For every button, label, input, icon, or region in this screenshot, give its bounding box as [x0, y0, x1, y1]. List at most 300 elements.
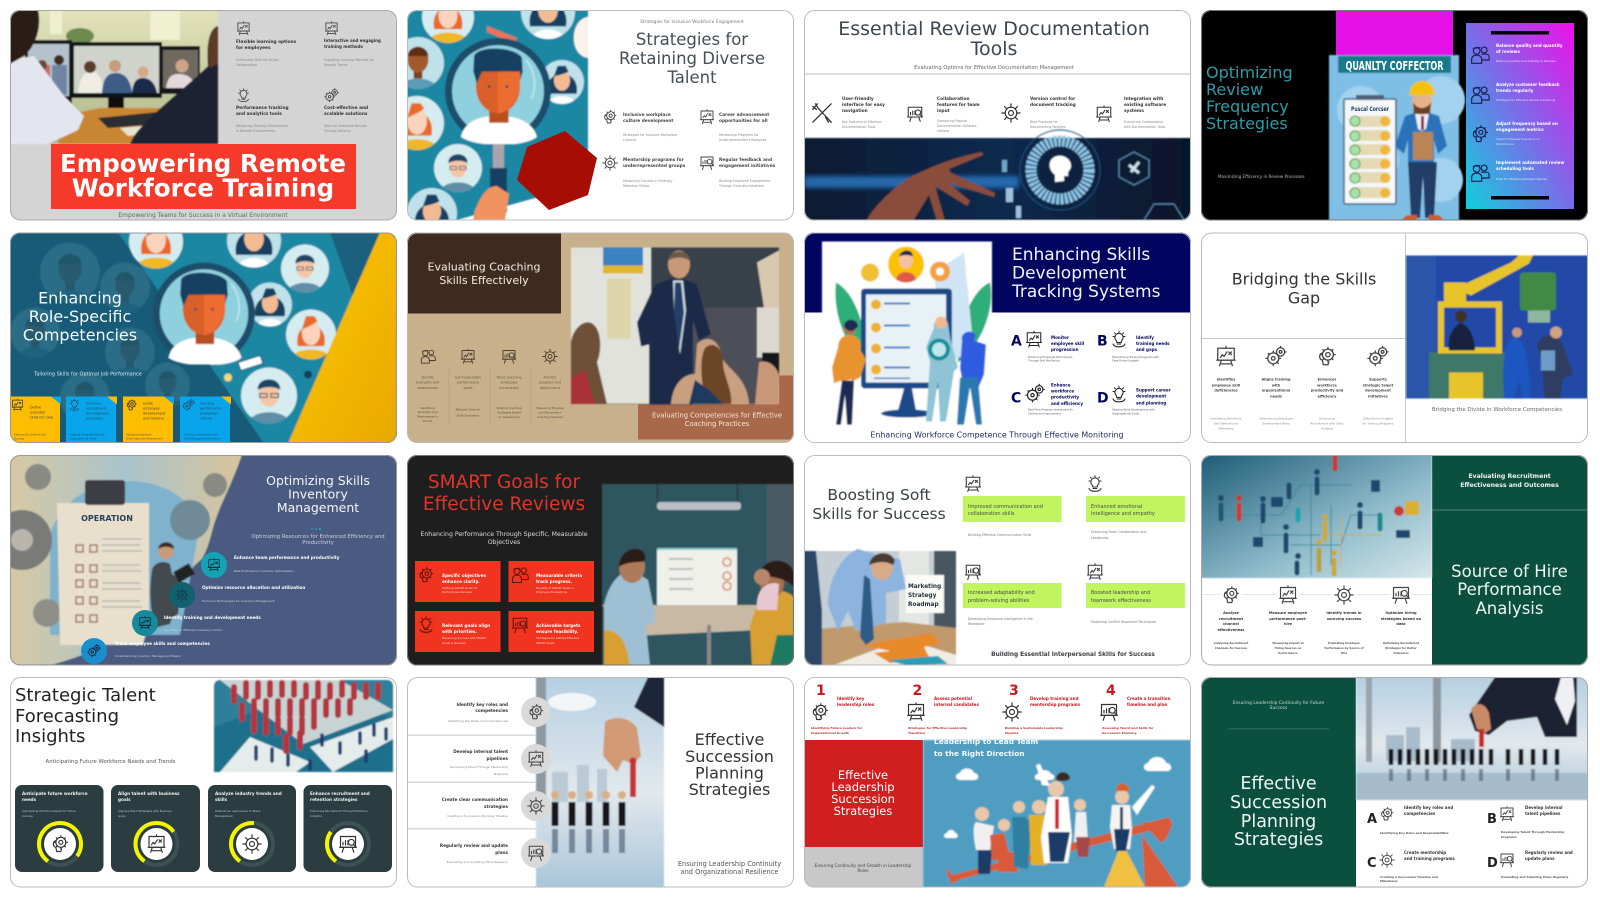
title: Enhancing: [38, 288, 122, 308]
subtitle: Empowering Teams for Success in a Virtual Environment: [118, 212, 288, 219]
caption: Bridging the Divide in Workforce Competencies: [1432, 407, 1562, 413]
roadmap sign: Strategy: [908, 593, 937, 599]
item: performance tracking: Performance tracking: [236, 105, 289, 111]
item: performance tracking: and analytics tools: [236, 111, 282, 117]
item D: Regularly review and: [1525, 850, 1573, 855]
subtitle: Anticipating Future Workforce Needs and Trends: [46, 759, 176, 765]
item: aligns training: organizational: [1262, 388, 1290, 392]
item: adjust frequency: [1473, 121, 1558, 146]
item: analyze channels: channel: [1223, 622, 1239, 626]
box: enhance recruitment: Aligning Competencies with: [70, 432, 105, 436]
red hexagon: [517, 131, 597, 210]
step 1: [811, 683, 875, 735]
subtitle: Success: [1270, 705, 1288, 711]
item: aligns training: Development Plans: [1262, 422, 1291, 426]
card: anticipate needs: Anticipate future workforce: [22, 791, 88, 796]
item: automated scheduling: scheduling tools: [1496, 166, 1534, 171]
card: analyze trends: [208, 785, 296, 873]
item A: monitor progression: employee skill: [1051, 341, 1085, 346]
item: user-friendly: [813, 96, 885, 129]
title: Succession: [685, 747, 774, 766]
item: improved communication: Improved communication and: [968, 504, 1043, 510]
item: leadership: Boosted leadership and: [1091, 590, 1150, 596]
step 1: Organizational Growth: [811, 731, 849, 735]
panel: Optimizing Skills Inventory Management: [0, 455, 397, 666]
item: inclusive culture: Inclusive workplace: [623, 112, 671, 118]
subtitle: Strategies for Inclusive Workforce Engagement: [640, 19, 744, 25]
tagline: Building Essential Interpersonal Skills for Success: [991, 652, 1155, 658]
title: Talent: [666, 68, 717, 87]
title: Forecasting: [15, 706, 119, 727]
item: adaptability: Developing Emotional Intelligence in the: [968, 617, 1033, 621]
illustration: operation checklist: [0, 455, 242, 665]
item: integration: Enhancing Collaboration: [1124, 120, 1163, 124]
panel: Enhancing Skills Development Tracking Systems: [804, 232, 1191, 444]
item: identifies deficiencies: employee skill: [1212, 384, 1240, 388]
item: integration: [1096, 96, 1166, 129]
item: review plans: plans: [495, 850, 509, 855]
item: balance quality: Balance quality and quantity: [1496, 43, 1563, 48]
panel: Effective Succession Planning Strategies (green): [1201, 677, 1588, 888]
item: career advancement: Underrepresented Employees: [719, 138, 767, 142]
title: Succession: [1230, 793, 1327, 813]
title: Analysis: [1476, 599, 1543, 618]
item: interactive training: training methods: [324, 44, 364, 49]
step 2: Strategies for Effective Leadership: [908, 726, 968, 730]
item: internal pipelines: [450, 744, 551, 776]
item: version control: document tracking: [1030, 102, 1076, 108]
title text: Workforce Training: [72, 174, 334, 202]
item: optimize allocation: [169, 582, 305, 608]
step 4: Create a transition: [1127, 696, 1171, 701]
item: interactive training: Interactive and engaging: [324, 38, 381, 43]
item: identify strengths: Strengths and: [418, 410, 438, 414]
item: enhances productivity: Enhancing: [1319, 416, 1335, 420]
item: measure performance: Measuring Impact of: [1272, 641, 1304, 645]
box: enhance recruitment: processes: [86, 416, 103, 420]
title: Insights: [15, 726, 85, 747]
item: identify strengths: Weaknesses in: [417, 414, 438, 418]
item: flexible learning: Enhancing Skills for Virtual: [236, 58, 279, 62]
item D: D: [1487, 856, 1498, 871]
item C: enhance productivity: workforce: [1051, 388, 1074, 394]
item: internal pipelines: Develop internal talent: [453, 749, 508, 754]
item: identify key roles: Identify key roles and: [456, 702, 508, 707]
item: optimize strategies: Outcomes: [1393, 651, 1409, 655]
item: identifies deficiencies: Identifies: [1217, 378, 1235, 382]
card: analyze trends: Management: [215, 814, 233, 818]
card: anticipate needs: [15, 785, 104, 873]
item: enhanced emotional intelligence: [1086, 476, 1185, 540]
panel: Source of Hire Performance Analysis: [1201, 449, 1588, 666]
item: inclusive culture: Cultures: [623, 138, 637, 142]
box: define skills: Success: [14, 436, 25, 440]
box: guide development: Skills Gaps and Development: [126, 436, 163, 440]
title: Frequency: [1206, 97, 1289, 116]
box: measurable criteria: Employee Evaluations: [536, 590, 567, 594]
item B: identify needs: Identify: [1136, 335, 1154, 340]
box: improve evaluation: [180, 396, 231, 444]
item: version control: Documenting Reviews: [1030, 125, 1066, 129]
green block: [1201, 677, 1356, 888]
box: achievable targets: ensure feasibility.: [536, 629, 579, 634]
photo: coach with team: [571, 248, 779, 404]
step 2: Assess potential: [934, 696, 973, 701]
item: leadership: Mastering Conflict Resolution Techniques: [1091, 620, 1157, 624]
item: adjust frequency: engagement metrics: [1496, 127, 1544, 132]
item: identify trends: [1324, 584, 1364, 655]
box: measurable criteria: Benefits of SMART Goals in: [536, 586, 574, 590]
item: aligns training: [1259, 346, 1293, 426]
item: supports strategy: for Training Programs: [1363, 422, 1394, 426]
item: supports strategy: Data-Driven Insights: [1363, 416, 1393, 420]
item C: enhance productivity: Enhance: [1051, 382, 1071, 388]
item A: competencies: [1404, 811, 1436, 816]
title: Optimizing: [1206, 63, 1293, 82]
panel: Effective Succession Planning Strategies (left list): [407, 677, 794, 888]
illustration: faces and magnifier: [10, 214, 397, 444]
item: optimize strategies: Strategies for Better: [1385, 646, 1417, 650]
heading on checklist: OPERATION: [81, 514, 133, 523]
item: inclusive culture: culture development: [623, 118, 673, 124]
box: achievable targets: Strategies for Setting Effective: [536, 636, 579, 640]
item: analyze feedback: Strategies for Effective Review Scheduling: [1496, 98, 1556, 102]
item: measurable goals: Effective Tools for: [456, 408, 481, 412]
item B: identify needs: training needs: [1136, 341, 1170, 346]
item C: enhance productivity: C: [1011, 390, 1021, 406]
item: analyze channels: Analyzing Recruitment: [1214, 641, 1249, 645]
item: user-friendly: navigation: [842, 108, 868, 114]
card: analyze trends: Analyze industry trends and: [215, 791, 282, 796]
item: improved communication: Building Effective Communication Skills: [968, 533, 1032, 537]
item: tailor strategies: accordingly: [499, 386, 519, 390]
item: enhanced emotional intelligence: Leadership: [1091, 536, 1109, 540]
item: identify key roles: competencies: [475, 708, 508, 713]
item: version control: Best Practices for: [1030, 120, 1059, 124]
item A: monitor progression: Enhancing Employee Performance: [1028, 355, 1073, 359]
item: aligns training: Aligns training: [1261, 378, 1291, 382]
item: flexible learning: Flexible learning options: [236, 39, 297, 45]
item: identify strengths: [416, 350, 439, 423]
photo: boardroom figures: [1356, 677, 1588, 800]
title: Skills for Success: [812, 505, 946, 523]
item: enhances productivity: efficiency: [1318, 394, 1337, 398]
card: enhance recruitment: Enhance recruitment and: [310, 791, 370, 796]
item D: support career: development: [1136, 394, 1166, 398]
item: supports strategy: development: [1365, 388, 1391, 392]
panel: Essential Review Documentation Tools: [804, 10, 1191, 221]
item D: Evaluating and Adjusting Plans Regularly: [1501, 875, 1568, 879]
item: monitor progress: progress and: [539, 380, 561, 384]
item: review plans: Evaluating and Adjusting Plans Regularly: [447, 860, 508, 864]
item B: identify needs: and gaps: [1136, 347, 1158, 352]
item: identify strengths: strengths and: [416, 380, 439, 384]
item: user-friendly: Key Features of Effective: [842, 120, 882, 124]
item: optimize strategies: Optimize hiring: [1385, 611, 1417, 615]
item: identify trends: Performance by Source of: [1324, 646, 1364, 650]
item: improved communication: collaboration skills: [968, 511, 1015, 517]
item C: [1367, 850, 1455, 883]
box: improve evaluation: evaluation: [200, 412, 218, 416]
item: enhance performance: Best Practices for Inventory Optimization: [234, 569, 294, 573]
step 1: Identifying Future Leaders for: [811, 726, 863, 730]
item: analyze channels: Channels for Success: [1215, 646, 1247, 650]
tagline: Enhancing Workforce Competence Through Effective Monitoring: [870, 430, 1124, 440]
box: achievable targets: SMART Goals: [536, 641, 555, 645]
item: identify training: Key Skills for Effective Inventory Control: [164, 628, 222, 632]
card: anticipate needs: Success: [22, 814, 33, 818]
item: review plans: Regularly review and update: [440, 843, 508, 848]
title: Strategies: [1206, 114, 1288, 133]
item: cost-effective: scalable solutions: [324, 111, 368, 117]
subtitle: Evaluating Recruitment: [1468, 473, 1551, 480]
item: career advancement: Career advancement: [719, 112, 769, 118]
box: measurable criteria: [508, 561, 594, 602]
roadmap sign: Roadmap: [908, 602, 939, 608]
item: user-friendly: User-friendly: [842, 96, 874, 102]
illustration: team and tracking monitor: [822, 242, 992, 424]
item: monitor progress: adjust plans: [540, 386, 561, 390]
step 2: internal candidates: [934, 702, 979, 707]
title: Enhancing Skills: [1012, 245, 1150, 265]
item: optimize strategies: [1381, 584, 1422, 655]
item D: support career: D: [1097, 390, 1109, 406]
box: define skills: Defining Key Skills for Job: [14, 432, 46, 436]
step 3: Develop training and: [1030, 696, 1079, 701]
panel: SMART Goals for Effective Reviews: [407, 455, 794, 666]
item: performance tracking: in Remote Environments: [236, 129, 276, 133]
item: adaptability: [963, 565, 1062, 626]
item: supports strategy: initiatives: [1368, 394, 1388, 398]
box: specific objectives: Performance Reviews: [442, 590, 473, 594]
box: enhance recruitment: recruitment: [86, 406, 107, 410]
item: cost-effective: Training Delivery: [323, 129, 351, 133]
subtitle: Objectives: [488, 539, 520, 546]
photo: hand and digital interface: [804, 130, 1191, 221]
item D: [1487, 850, 1573, 879]
subtitle: Optimizing Resources for Enhanced Efficiency and: [251, 534, 385, 540]
card: anticipate needs: Anticipating Workforce Needs for Future: [22, 809, 76, 813]
step 3: Pipeline: [1005, 731, 1019, 735]
card: anticipate needs: needs: [22, 797, 37, 802]
item: adjust frequency: Performance: [1496, 142, 1514, 146]
gauge: [319, 815, 377, 873]
box: enhance recruitment: and selection: [86, 412, 109, 416]
step 2: [908, 683, 979, 735]
item: measure performance: Measure employee: [1269, 611, 1308, 615]
box: specific objectives: Defining SMART Goals for: [442, 586, 478, 590]
item: inclusive culture: Strategies for Inclusive Workplace: [623, 133, 677, 137]
step 2: Transition: [908, 731, 925, 735]
box: achievable targets: [508, 611, 594, 652]
item: enhanced emotional intelligence: intelligence and empathy: [1091, 511, 1155, 517]
item D: support career: and planning: [1136, 400, 1166, 406]
item: identify trends: Evaluating Employee: [1328, 641, 1360, 645]
item: monitor progress: and Outcomes in: [538, 410, 562, 414]
item A: A: [1367, 812, 1377, 827]
item: measurable goals: Set measurable: [455, 376, 481, 380]
title: SMART Goals for: [428, 472, 580, 493]
item: identify strengths: Clients: [423, 419, 433, 423]
item: identify trends: Hire: [1341, 651, 1347, 655]
item: measure performance: [1269, 584, 1308, 655]
item: internal pipelines: pipelines: [487, 756, 508, 761]
title: Evaluating Coaching: [428, 260, 540, 274]
item: leadership: [1086, 564, 1185, 624]
item B: identify needs: Data-Driven Insights: [1112, 358, 1139, 362]
item: adjust frequency: Adjust frequency based on: [1496, 121, 1558, 126]
item C: enhance productivity: Continuous Improvement: [1028, 412, 1061, 416]
step 4: [1101, 683, 1171, 735]
item: collaboration: input: [937, 108, 950, 114]
item B: Developing Talent Through Mentorship: [1501, 830, 1564, 834]
panel: Strategic Talent Forecasting Insights: [10, 677, 397, 888]
title: Leadership: [831, 780, 895, 794]
title band: [804, 232, 1191, 312]
photo: strategy roadmap: [804, 549, 956, 666]
item: feedback: Regular feedback and: [719, 157, 772, 163]
item: adaptability: Increased adaptability and: [968, 590, 1035, 596]
box: improve evaluation: Skills Management Solutions: [184, 436, 221, 440]
item: mentorship: Retention Efforts: [623, 184, 650, 188]
box: relevant goals: Relevant goals align: [442, 623, 490, 628]
item: analyze channels: recruitment: [1219, 617, 1243, 621]
item: internal pipelines: Programs: [494, 772, 508, 776]
item: collaboration: Comparing Popular: [937, 119, 968, 123]
item D: support career: [1097, 386, 1171, 416]
panel: Optimizing Review Frequency Strategies: [1201, 10, 1588, 221]
item: feedback: [700, 157, 776, 188]
item: tailor strategies: Strategies Based: [497, 410, 521, 414]
box: guide development: employee: [143, 406, 160, 410]
illustration heading: QUANLTY COFFECTOR: [1346, 59, 1444, 73]
clipboard heading: Puscal Corcser: [1351, 106, 1389, 113]
illustration caption: to the Right Direction: [934, 749, 1025, 758]
box: relevant goals: Measuring Success with SMART: [442, 636, 486, 640]
item D: update plans: [1525, 856, 1555, 861]
item C: enhance productivity: [1011, 382, 1083, 416]
caption: Evaluating Competencies for Effective: [652, 412, 782, 420]
title: Competencies: [23, 326, 137, 344]
box: improve evaluation: performance: [200, 406, 222, 410]
item: track employee skills: Understanding Inventory Management Basics: [115, 654, 182, 658]
caption: Ensuring Continuity and Growth in Leadership: [815, 863, 912, 868]
title: Performance: [1457, 580, 1562, 599]
title: Strategies: [1234, 830, 1323, 850]
item D: support career: Organizational Goals: [1112, 412, 1140, 416]
item: monitor progress: Measuring Progress: [536, 406, 564, 410]
caption: Roles: [857, 868, 869, 873]
box: enhance recruitment: Organizational Goals: [70, 436, 97, 440]
card: align talent: Align talent with business: [118, 791, 180, 796]
item: version control: Version control for: [1030, 96, 1076, 102]
box: achievable targets: Achievable targets: [536, 623, 581, 628]
subtitle: Ensuring Leadership Continuity: [678, 860, 781, 868]
item: improved communication: [963, 476, 1062, 537]
illustration: quality inspector: [1329, 55, 1465, 221]
step 1: leadership roles: [837, 702, 875, 707]
title: Succession: [831, 792, 895, 806]
box: specific objectives: Specific objectives: [442, 573, 486, 578]
step 3: [1003, 683, 1081, 735]
panel: Evaluating Coaching Skills Effectively: [407, 232, 794, 444]
item B: Develop internal: [1525, 805, 1563, 810]
item: interactive training: Engaging Learning Methods for: [324, 58, 375, 62]
photo: machine and people: [1406, 256, 1588, 398]
item: career advancement: [700, 110, 769, 142]
title: Strategies: [689, 780, 770, 799]
item: identify strengths: weaknesses: [417, 386, 438, 390]
item: identify strengths: Identifying: [420, 406, 435, 410]
subtitle: and Organizational Resilience: [681, 868, 778, 876]
item: enhances productivity: productivity and: [1311, 388, 1344, 392]
item: enhances productivity: [1310, 347, 1344, 430]
item: identifies deficiencies: Effectively: [1218, 426, 1234, 430]
item: adaptability: Workplace: [968, 622, 985, 626]
item: analyze feedback: Analyze customer feedback: [1496, 82, 1560, 87]
gauge: [31, 815, 89, 873]
title: Role-Specific: [29, 307, 131, 326]
box: specific objectives: enhance clarity.: [442, 579, 480, 584]
item: enhance performance: Enhance team performance and productivity: [234, 555, 340, 560]
item: identifies deficiencies: Identifying Workforce: [1211, 416, 1242, 420]
item: measurable goals: goals: [463, 386, 473, 390]
item: tailor strategies: Tailor coaching: [495, 376, 522, 380]
item: career advancement: opportunities for all: [719, 118, 768, 124]
item: review plans: [440, 838, 551, 868]
item: communication: strategies: [484, 804, 508, 809]
card: enhance recruitment: Analytics: [310, 814, 323, 818]
red title block: [804, 740, 923, 847]
item: measurable goals: [455, 349, 481, 418]
item A: monitor progression: Through Skill Monitoring: [1028, 358, 1060, 362]
item: communication: [442, 791, 551, 821]
step 2: 2: [912, 683, 922, 699]
item: balance quality: [1472, 43, 1563, 63]
item: enhances productivity: workforce: [1317, 384, 1338, 388]
item B: identify needs: B: [1097, 334, 1108, 350]
item: enhanced emotional intelligence: Enhancing Team Collaboration and: [1091, 530, 1146, 534]
box: guide development: [123, 396, 174, 444]
gauge: [223, 815, 281, 873]
title: Tracking Systems: [1011, 282, 1161, 302]
item: track employee skills: [81, 638, 210, 664]
title: Planning: [695, 764, 764, 782]
photo: meeting room: [602, 484, 794, 666]
item: supports strategy: [1363, 346, 1394, 426]
item A: [1367, 805, 1453, 835]
item: tailor strategies: strategies: [501, 380, 518, 384]
item: identify training: Identify training and development needs: [164, 615, 261, 620]
item: automated scheduling: [1472, 160, 1564, 181]
item C: enhance productivity: and efficiency: [1051, 401, 1083, 406]
item: integration: Integration with: [1124, 96, 1163, 102]
item: enhances productivity: Recruitment with Skills: [1310, 422, 1344, 426]
item: analyze channels: Analyze: [1223, 611, 1239, 615]
caption: Coaching Practices: [685, 420, 750, 428]
panel: Bridging the Skills Gap: [1201, 232, 1588, 444]
box: relevant goals: Goals in Reviews: [442, 641, 466, 645]
item: performance tracking: Measuring Training Effectiveness: [236, 124, 289, 128]
item: feedback: Through Diversity Initiatives: [718, 184, 764, 188]
item: optimize strategies: Optimizing Recruitment: [1383, 641, 1420, 645]
caption block: [638, 376, 794, 440]
item: flexible learning: for employees: [236, 45, 271, 51]
panel: Enhancing Role-Specific Competencies: [10, 214, 397, 444]
item: analyze feedback: trends regularly: [1496, 88, 1534, 93]
item: tailor strategies: Tailoring Coaching: [495, 406, 522, 410]
green side block: [1432, 455, 1588, 666]
